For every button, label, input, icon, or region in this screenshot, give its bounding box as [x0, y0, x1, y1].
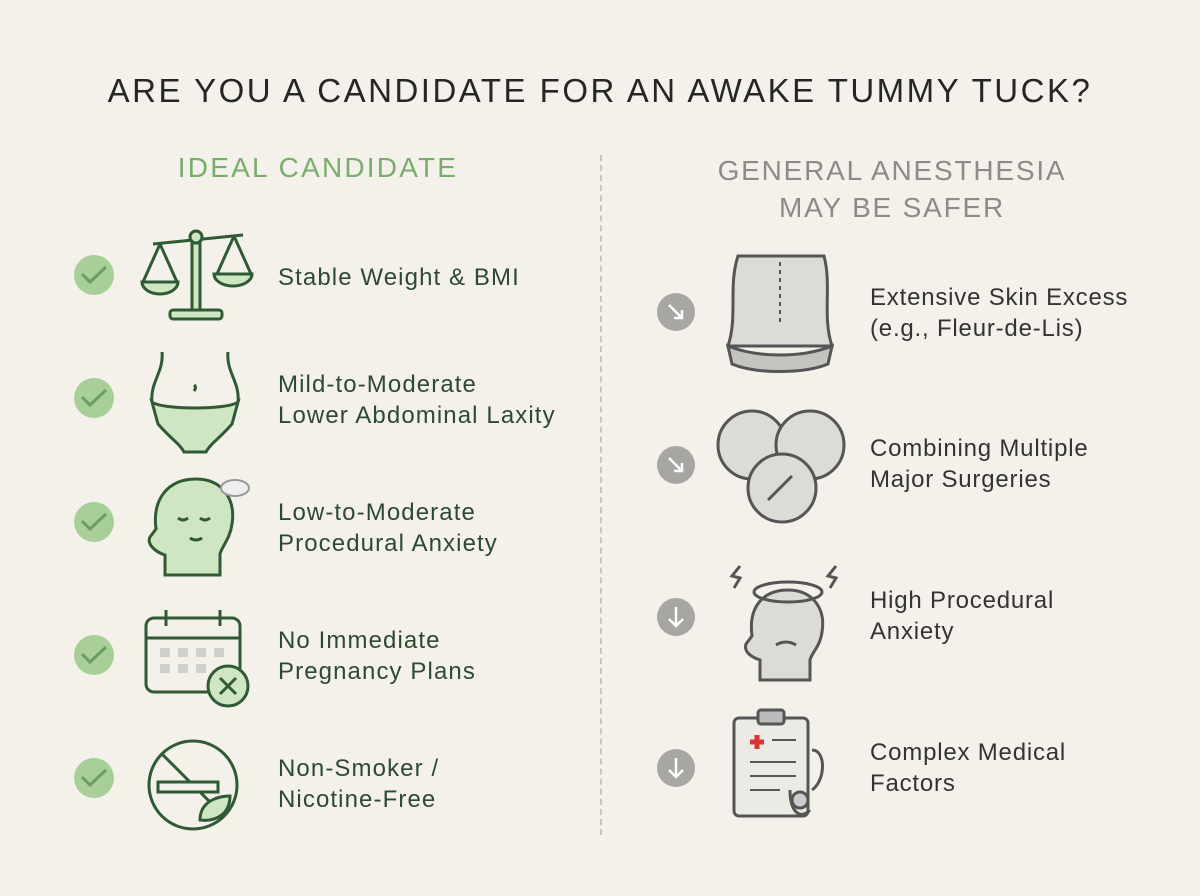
- icon: no smoking: [149, 741, 237, 829]
- icon: circles surgeries: [718, 411, 844, 522]
- text: laxity: [278, 371, 556, 429]
- icon: arrow 1: [657, 293, 695, 331]
- icon: anxious head: [732, 566, 836, 680]
- text: medical factors: Complex Medical: [870, 739, 1066, 766]
- text: high anxiety: [870, 587, 1054, 645]
- text: skin excess: (e.g., Fleur-de-Lis): [870, 315, 1083, 342]
- title: ARE YOU A CANDIDATE FOR AN AWAKE TUMMY TUCK?: [108, 72, 1092, 109]
- icon: arrow 4: [657, 749, 695, 787]
- icon: check 4: [74, 635, 114, 675]
- icon: clipboard: [734, 710, 822, 816]
- text: high anxiety: High Procedural: [870, 587, 1054, 614]
- heading: general anesthesia: MAY BE SAFER: [779, 192, 1005, 223]
- text: medical factors: [870, 739, 1066, 797]
- icon: torso fleur: [728, 256, 832, 372]
- text: multiple surgeries: Combining Multiple: [870, 435, 1088, 462]
- icon: arrow 3: [657, 598, 695, 636]
- icon: arrow 2: [657, 446, 695, 484]
- text: skin excess: [870, 284, 1128, 342]
- text: nonsmoker: Nicotine-Free: [278, 786, 436, 813]
- icon: check 2: [74, 378, 114, 418]
- text: multiple surgeries: Major Surgeries: [870, 466, 1051, 493]
- text: high anxiety: Anxiety: [870, 618, 954, 645]
- icon: abdomen: [152, 352, 238, 452]
- text: multiple surgeries: [870, 435, 1088, 493]
- text: laxity: Lower Abdominal Laxity: [278, 402, 556, 429]
- icon: scale: [142, 231, 252, 319]
- text: skin excess: Extensive Skin Excess: [870, 284, 1128, 311]
- icon: check 1: [74, 255, 114, 295]
- text: anxiety low: [278, 499, 498, 557]
- icon: check 5: [74, 758, 114, 798]
- text: medical factors: Factors: [870, 770, 956, 797]
- text: nonsmoker: [278, 755, 439, 813]
- text: laxity: Mild-to-Moderate: [278, 371, 477, 398]
- icon: check 3: [74, 502, 114, 542]
- text: anxiety low: Low-to-Moderate: [278, 499, 476, 526]
- icon: calendar: [146, 610, 248, 706]
- text: pregnancy: [278, 627, 476, 685]
- heading: general anesthesia: [718, 155, 1066, 223]
- text: nonsmoker: Non-Smoker /: [278, 755, 439, 782]
- left list: [74, 230, 254, 830]
- right list: [657, 254, 846, 818]
- text: pregnancy: No Immediate: [278, 627, 441, 654]
- text: pregnancy: Pregnancy Plans: [278, 658, 476, 685]
- heading: general anesthesia: GENERAL ANESTHESIA: [718, 155, 1066, 186]
- icon: head: [149, 479, 249, 575]
- text: anxiety low: Procedural Anxiety: [278, 530, 498, 557]
- text: stable weight: Stable Weight & BMI: [278, 264, 520, 291]
- heading: ideal candidate: IDEAL CANDIDATE: [178, 152, 458, 183]
